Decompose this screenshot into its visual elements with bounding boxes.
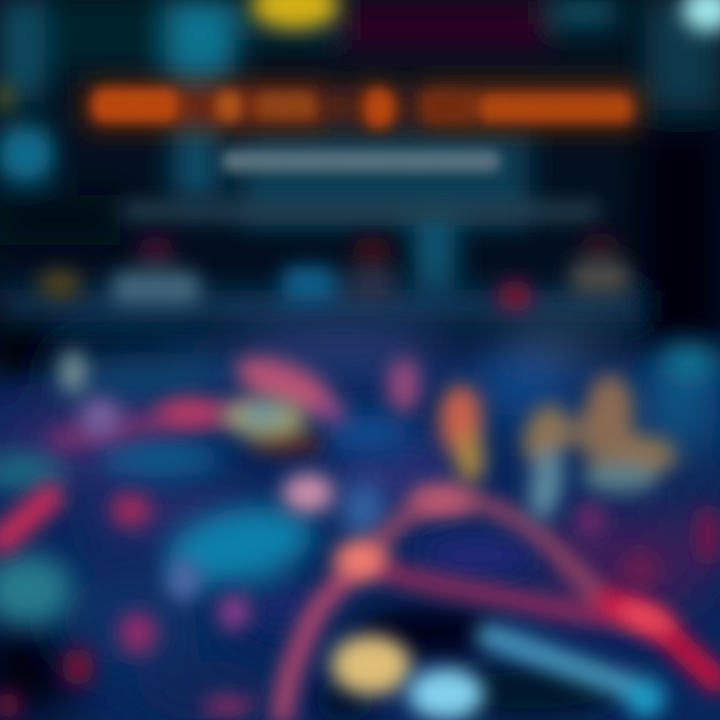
map landmark: pale oval [222,398,323,454]
pink ridge [156,345,348,426]
dark map corners [315,608,625,720]
header backdrop [0,0,720,362]
map landmark: yellow disc [331,635,411,695]
title glow [85,84,640,128]
map landmark: light blue shapes [408,636,665,720]
top highlights [0,0,720,177]
label row [38,233,630,312]
pale road junctions [282,473,680,643]
subtitle: Visual city guide [222,151,500,173]
brown and teal buildings [514,374,677,523]
description line [120,202,600,220]
map spots [0,357,720,719]
subtitle [222,150,500,173]
title [92,87,632,129]
red road network [2,410,716,716]
title text: RED STYLE & CAMERA [92,87,632,129]
orange tower [439,384,484,484]
map base colours [0,327,720,720]
map blue districts [0,345,717,629]
marker pin [59,350,87,394]
